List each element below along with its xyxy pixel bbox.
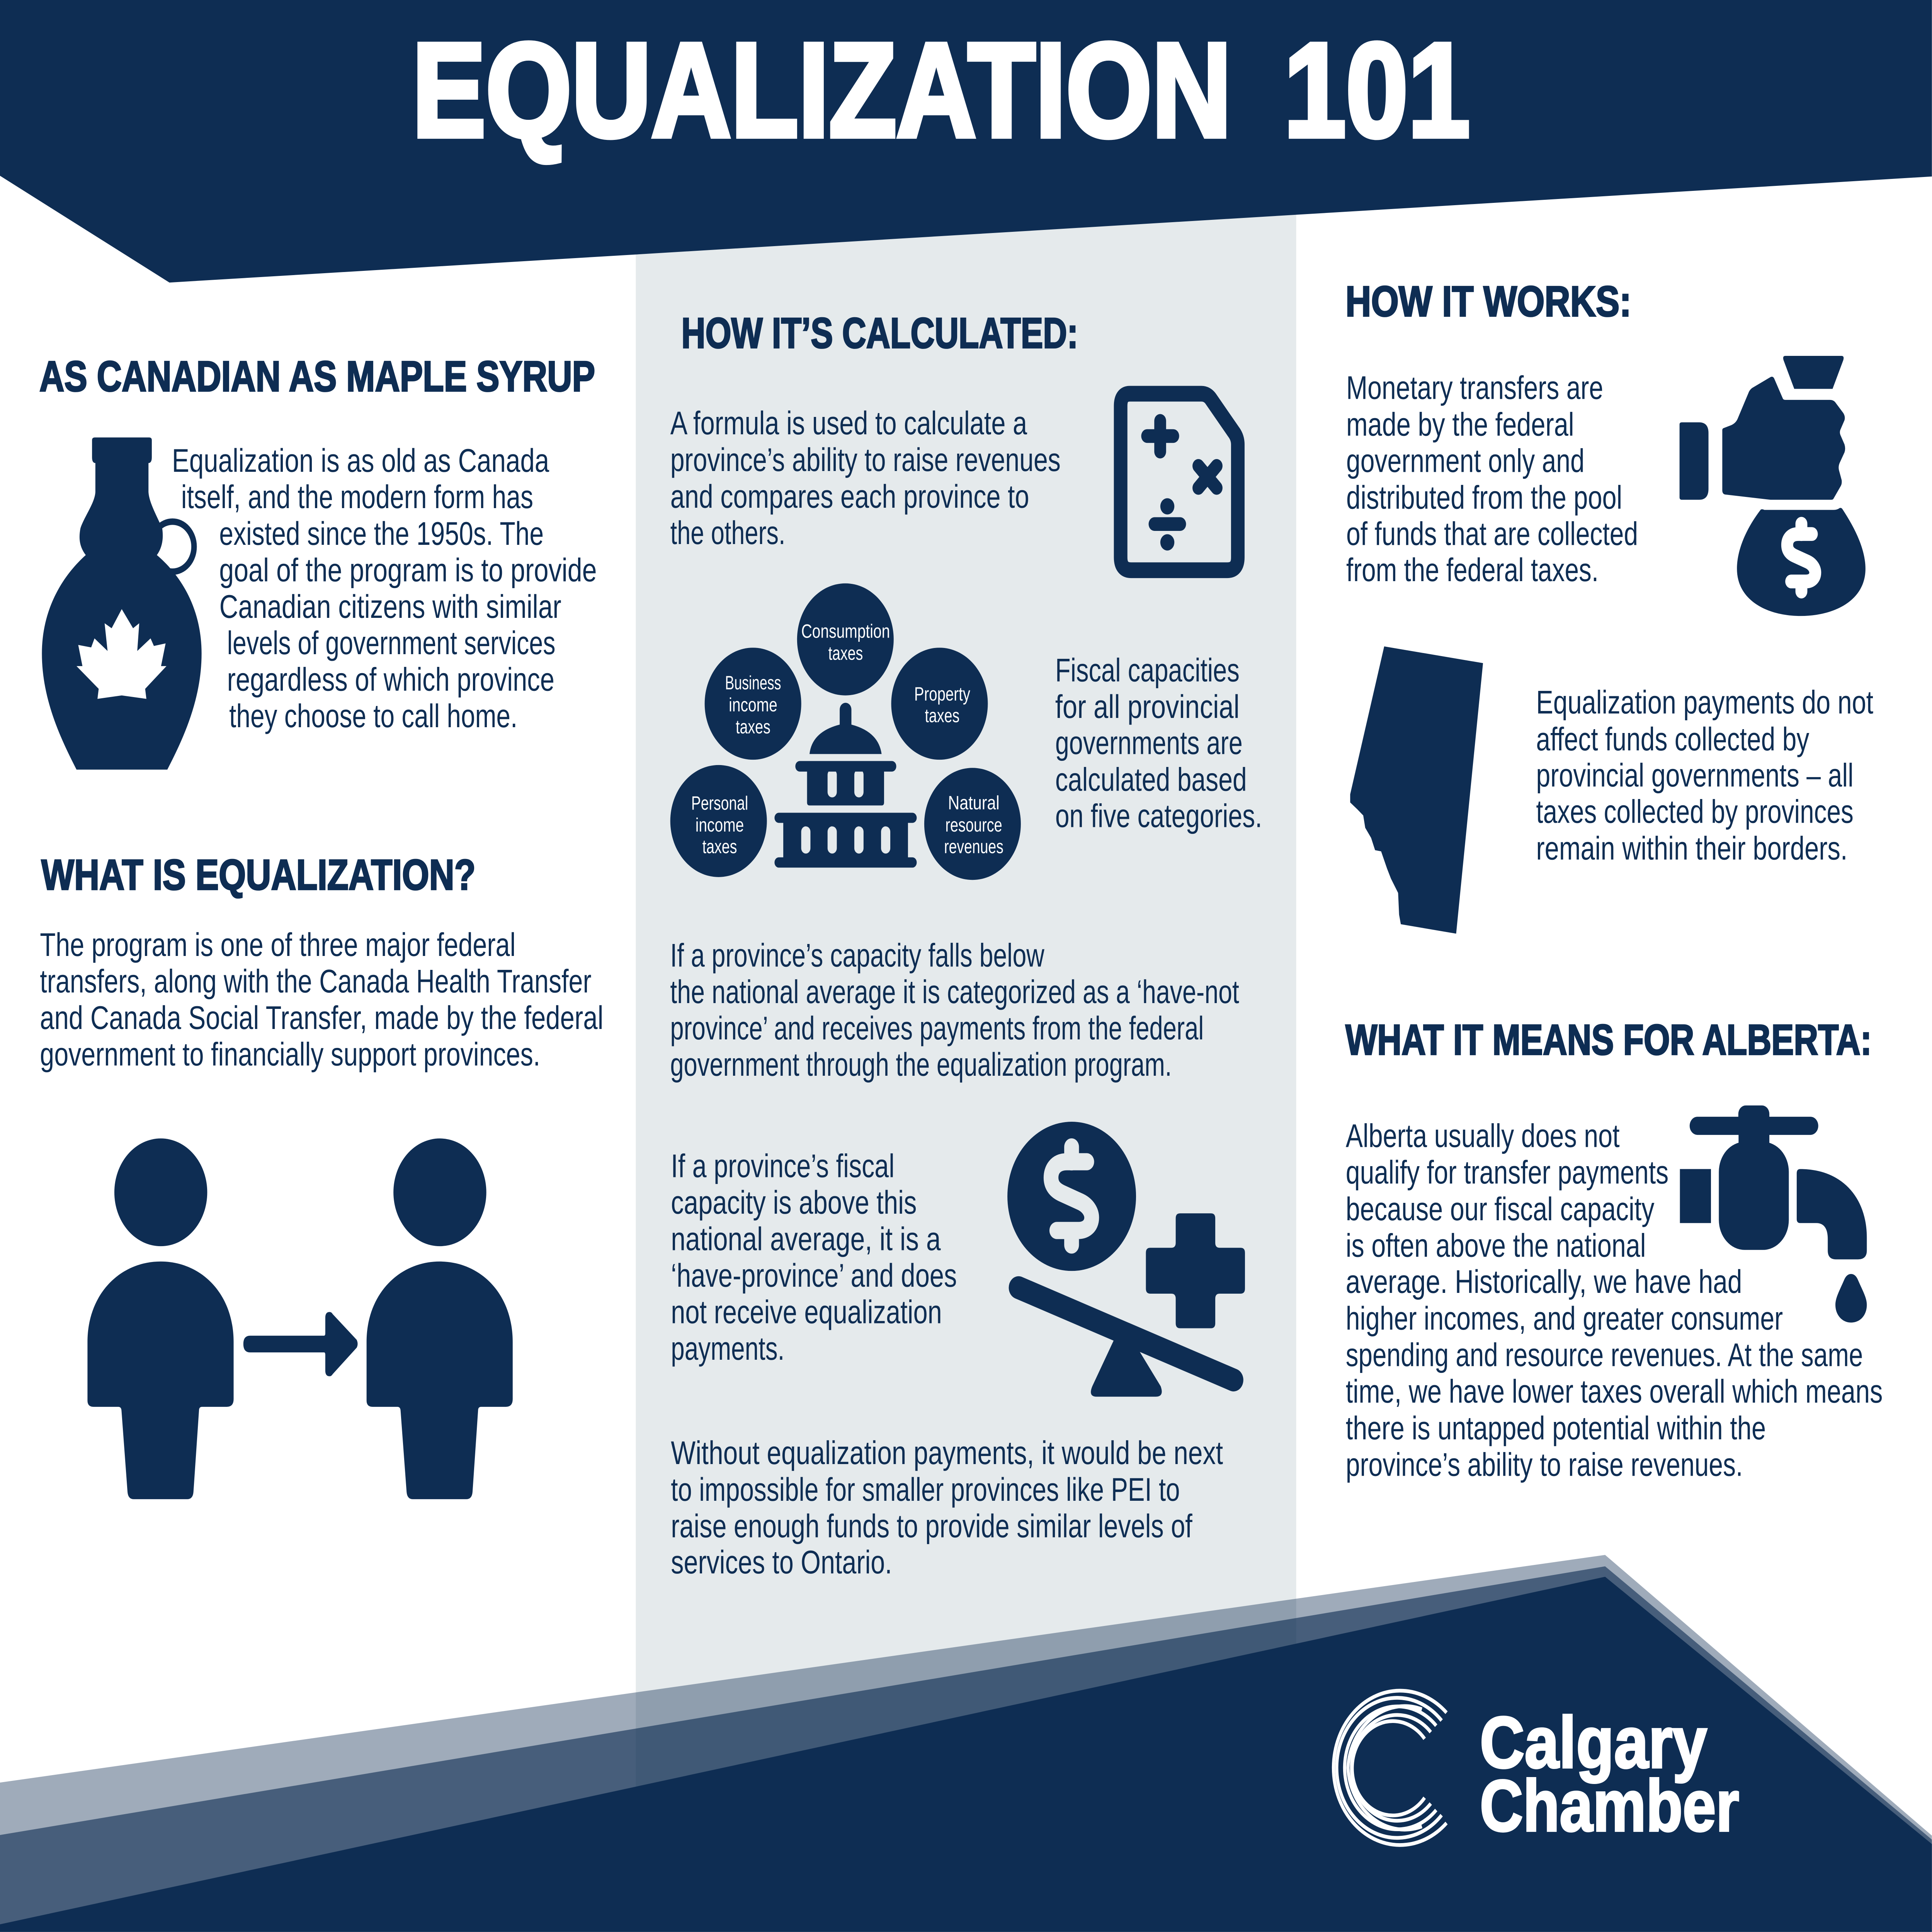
text block: Alberta: time, we have lower taxes overall which means [1346,1373,1883,1410]
text block: have province: If a province’s fiscal [671,1147,895,1184]
text block: formula [670,404,1061,551]
text block: monetary transfers [1346,369,1638,588]
text block: have province: national average, it is a [671,1220,941,1257]
text block: have province: capacity is above this [671,1184,917,1221]
icon: Alberta map [1350,646,1483,934]
text block: equalization history: existed since the 1950s. The [219,515,544,552]
text block: monetary transfers: made by the federal [1346,406,1574,443]
text block: without equalization: to impossible for smaller provinces like PEI to [671,1471,1180,1508]
category: natural resource revenues [924,768,1021,880]
text block: Alberta: higher incomes, and greater consumer [1346,1299,1783,1337]
text block: formula: province’s ability to raise revenues [670,441,1061,478]
category: natural resource revenues: resource [945,815,1002,836]
heading: what is equalization: WHAT IS EQUALIZATION? [41,852,476,900]
text block: have province: not receive equalization [671,1293,942,1330]
heading: as Canadian as maple syrup: AS CANADIAN AS MAPLE SYRUP [39,354,595,401]
text block: equalization history: Canadian citizens with similar [219,588,562,625]
heading: how it's calculated: HOW IT’S CALCULATED: [681,311,1078,358]
icon: formula document [1121,394,1238,570]
icon: person giving [87,1138,234,1499]
icon: legislature building [774,703,917,867]
text block: have province [671,1147,957,1367]
text block: Alberta: average. Historically, we have had [1346,1263,1742,1300]
text block: monetary transfers: government only and [1346,442,1585,479]
text block: provincial funds: Equalization payments do not [1536,684,1874,721]
icon: dripping tap [1680,1105,1867,1323]
text block: have-not province: If a province’s capacity falls below [670,937,1045,974]
category: property taxes: taxes [925,705,960,726]
text block: fiscal capacities: for all provincial [1055,688,1240,725]
category: personal income taxes: Personal [691,793,748,814]
category: business income taxes: Business [725,672,781,694]
text block: provincial funds [1536,684,1874,867]
text block: have province: payments. [671,1330,784,1367]
text block: fiscal capacities: governments are [1055,724,1243,761]
text block: monetary transfers: of funds that are collected [1346,515,1638,552]
text block: provincial funds: affect funds collected by [1536,720,1810,757]
category: property taxes [891,648,988,760]
text block: Alberta: spending and resource revenues. At the same [1346,1336,1863,1373]
panel: what is equalization [40,852,604,1499]
text block: have province: ‘have-province’ and does [671,1257,957,1294]
panel: as Canadian as maple syrup [39,354,597,770]
category: natural resource revenues: Natural [948,792,1000,814]
title: 101 [1284,15,1470,165]
text block: formula: the others. [670,514,786,551]
text block: Alberta: province’s ability to raise revenues. [1346,1446,1743,1483]
text block: equalization history: goal of the program is to provide [219,551,597,588]
text block: without equalization: services to Ontario. [671,1543,892,1581]
text block: without equalization: Without equalization payments, it would be next [671,1434,1224,1471]
category: personal income taxes [670,765,767,877]
text block: Alberta: qualify for transfer payments [1346,1154,1668,1191]
icon: arrow between people [243,1312,358,1376]
text block: have-not province [670,937,1240,1083]
category: consumption taxes [797,583,894,696]
text block: have-not province: province’ and receives payments from the federal [670,1009,1204,1046]
text block: Alberta: because our fiscal capacity [1346,1190,1655,1227]
category: personal income taxes: taxes [702,836,737,857]
category: consumption taxes: Consumption [801,621,890,642]
text block: federal transfers: government to financially support provinces. [40,1036,540,1073]
text block: Alberta: Alberta usually does not [1346,1117,1620,1154]
logo wordmark [1480,1702,1739,1847]
text block: Alberta: there is untapped potential within the [1346,1409,1766,1446]
text block: equalization history: regardless of which province [227,661,554,698]
text block: without equalization: raise enough funds to provide similar levels of [671,1507,1193,1544]
text block: equalization history: levels of government services [227,624,556,662]
category: natural resource revenues: revenues [944,836,1004,857]
panel: how it works [1345,279,1874,934]
text block: monetary transfers: distributed from the pool [1346,479,1622,516]
text block: equalization history: Equalization is as old as Canada [172,442,549,479]
text block: fiscal capacities: Fiscal capacities [1055,651,1240,689]
text block: provincial funds: remain within their borders. [1536,830,1848,867]
header banner [0,0,1932,282]
text block: equalization history [172,442,597,734]
text block: federal transfers: The program is one of three major federal [40,926,516,963]
text block: formula: A formula is used to calculate a [670,404,1027,441]
title: EQUALIZATION [412,15,1231,165]
category: business income taxes [705,648,801,760]
category: personal income taxes: income [696,815,744,836]
text block: monetary transfers: from the federal taxes. [1346,551,1599,588]
logo wordmark: Chamber [1480,1765,1739,1847]
text block: federal transfers: and Canada Social Transfer, made by the federal [40,999,604,1036]
text block: provincial funds: provincial governments – all [1536,757,1854,794]
icon: person receiving [367,1138,513,1499]
category: business income taxes: income [729,694,777,716]
category: property taxes: Property [914,684,971,705]
text block: fiscal capacities: calculated based [1055,761,1247,798]
text block: Alberta: is often above the national [1346,1227,1646,1264]
footer: layered angular bands [0,1555,1932,1932]
logo: Calgary Chamber [1333,1690,1739,1847]
heading: how it works: HOW IT WORKS: [1345,279,1631,326]
text block: equalization history: they choose to call home. [229,697,517,734]
logo mark: concentric C [1333,1690,1447,1845]
text block: formula: and compares each province to [670,478,1029,515]
text block: have-not province: the national average it is categorized as a ‘have-not [670,973,1240,1010]
icon: dollar coin and health cross on a seesaw [1007,1122,1245,1397]
logo wordmark: Calgary [1480,1702,1708,1783]
icon: hand holding money bag [1680,356,1866,616]
panel: how it's calculated [670,311,1262,1581]
category: business income taxes: taxes [736,716,771,738]
heading: what it means for Alberta: WHAT IT MEANS FOR ALBERTA: [1345,1017,1872,1065]
icon: maple syrup bottle [42,437,202,770]
category: consumption taxes: taxes [828,643,863,664]
text block: federal transfers [40,926,604,1073]
diagram: five tax categories around legislature [670,583,1021,880]
text block: provincial funds: taxes collected by provinces [1536,793,1854,830]
panel: how it's calculated background [636,200,1296,1872]
text block: monetary transfers: Monetary transfers are [1346,369,1603,406]
text block: without equalization [671,1434,1224,1581]
panel: what it means for Alberta [1345,1017,1883,1483]
text block: equalization history: itself, and the modern form has [181,478,533,515]
text block: have-not province: government through the equalization program. [670,1046,1172,1083]
text block: fiscal capacities [1055,651,1262,834]
text block: fiscal capacities: on five categories. [1055,797,1262,834]
text block: Alberta [1346,1117,1883,1483]
text block: federal transfers: transfers, along with the Canada Health Transfer [40,963,592,1000]
